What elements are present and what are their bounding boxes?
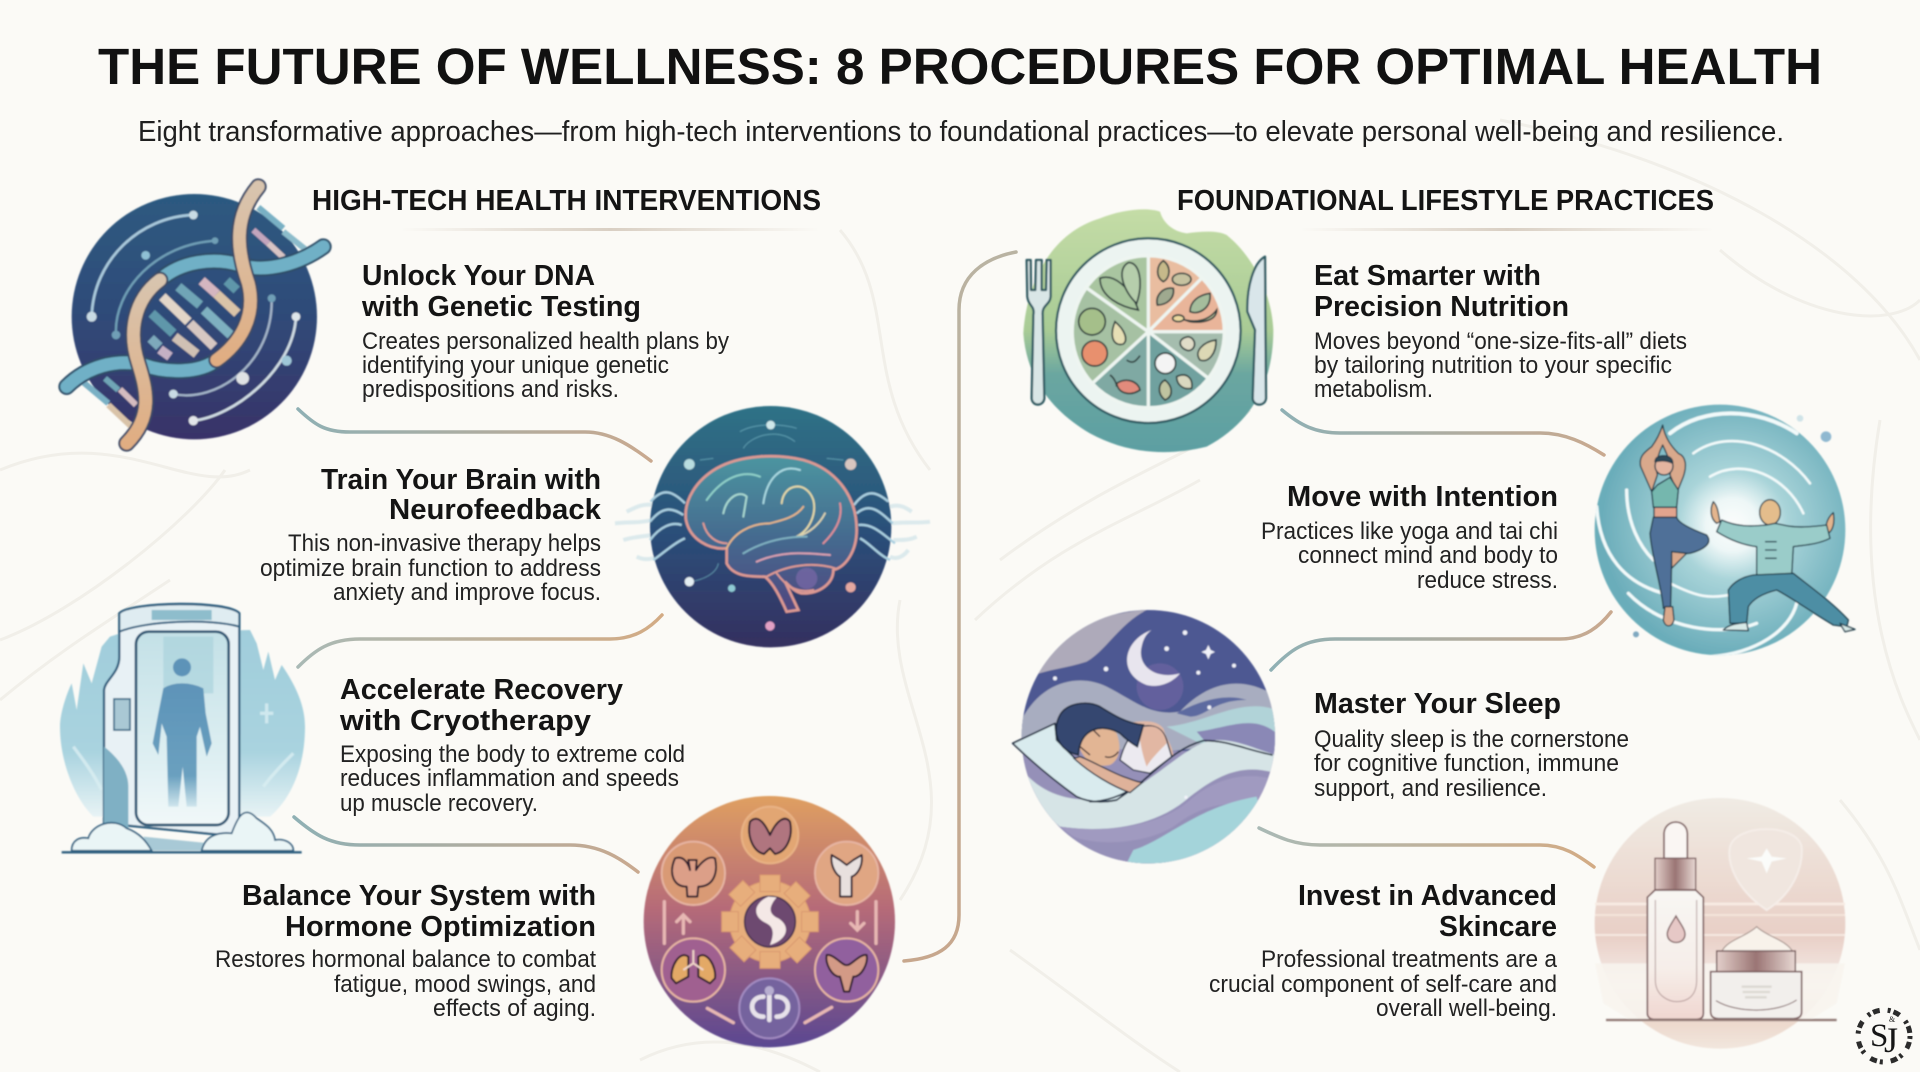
icon: skincare products (1595, 798, 1845, 1049)
text: neurofeedback: This non-invasive therapy helps (288, 530, 601, 557)
text: genetic testing: Unlock Your DNA (362, 260, 595, 292)
text: hormone optimization: Restores hormonal balance to combat (215, 946, 596, 973)
text: hormone optimization: Hormone Optimization (285, 911, 596, 943)
text: neurofeedback (260, 464, 602, 606)
title: THE FUTURE OF WELLNESS: 8 PROCEDURES FOR OPTIMAL HEALTH (98, 38, 1822, 95)
text: neurofeedback: Neurofeedback (389, 494, 602, 526)
icon: DNA helix (67, 187, 323, 443)
text: master your sleep: support, and resilience. (1314, 775, 1547, 802)
text: advanced skincare (1209, 880, 1557, 1022)
text: advanced skincare: crucial component of self-care and (1209, 971, 1557, 998)
text: move with intention: Move with Intention (1287, 481, 1558, 513)
connector: brain to cryotherapy (298, 615, 662, 667)
watermark logo (1858, 1010, 1910, 1062)
section heading: high-tech health interventions: HIGH-TECH HEALTH INTERVENTIONS (312, 185, 821, 217)
section heading: foundational lifestyle practices: FOUNDATIONAL LIFESTYLE PRACTICES (1177, 185, 1714, 217)
text: cryotherapy: up muscle recovery. (340, 790, 538, 817)
watermark logo: & (1889, 1015, 1896, 1024)
text: advanced skincare: Professional treatments are a (1261, 946, 1557, 973)
icon: cryotherapy chamber (60, 604, 305, 852)
text: neurofeedback: Train Your Brain with (321, 464, 601, 496)
text: master your sleep: Master Your Sleep (1314, 688, 1561, 720)
icon: yoga and tai chi (1595, 405, 1855, 657)
text: move with intention: reduce stress. (1417, 567, 1558, 594)
section heading: high-tech health interventions (312, 185, 821, 231)
icon: sleeping woman (1013, 607, 1280, 873)
connector: DNA to brain (298, 409, 651, 461)
text: cryotherapy (339, 674, 685, 817)
text: hormone optimization: fatigue, mood swings, and (334, 971, 596, 998)
text: advanced skincare: overall well-being. (1376, 995, 1557, 1022)
connector: plate to yoga (1282, 410, 1604, 455)
connector: cryotherapy to hormones (294, 817, 638, 872)
text: master your sleep (1314, 688, 1629, 802)
text: hormone optimization: Balance Your System with (242, 880, 596, 912)
text: precision nutrition: by tailoring nutrition to your specific (1314, 352, 1672, 379)
connector: hormones to plate (central spine) (904, 252, 1016, 961)
text: precision nutrition: Eat Smarter with (1314, 260, 1541, 292)
text: genetic testing: identifying your unique genetic (362, 352, 669, 379)
watermark logo: S (1870, 1018, 1888, 1054)
text: cryotherapy: Accelerate Recovery (340, 674, 623, 706)
icon: hormone system (644, 796, 895, 1047)
text: precision nutrition (1314, 260, 1687, 403)
text: master your sleep: for cognitive function, immune (1314, 750, 1619, 777)
text: genetic testing (361, 260, 730, 403)
text: move with intention (1261, 481, 1558, 594)
text: genetic testing: with Genetic Testing (361, 291, 641, 323)
text: master your sleep: Quality sleep is the cornerstone (1314, 726, 1629, 753)
text: genetic testing: predispositions and risks. (362, 376, 619, 403)
text: advanced skincare: Skincare (1439, 911, 1557, 943)
connector: sleep to skincare (1259, 828, 1594, 867)
text: hormone optimization: effects of aging. (433, 995, 596, 1022)
icon: brain (615, 406, 930, 647)
subtitle: Eight transformative approaches—from high-tech interventions to foundational practices—to elevate personal well-being and resilience. (138, 116, 1784, 148)
section heading: foundational lifestyle practices (1177, 185, 1714, 231)
text: move with intention: Practices like yoga and tai chi (1261, 518, 1558, 545)
watermark logo: J (1884, 1020, 1898, 1060)
icon: nutrition plate (1023, 209, 1273, 452)
text: neurofeedback: anxiety and improve focus. (333, 579, 601, 606)
text: genetic testing: Creates personalized health plans by (362, 328, 730, 355)
text: cryotherapy: reduces inflammation and speeds (340, 765, 679, 792)
text: cryotherapy: with Cryotherapy (339, 705, 591, 737)
text: neurofeedback: optimize brain function to address (260, 555, 601, 582)
text: precision nutrition: Precision Nutrition (1314, 291, 1569, 323)
text: move with intention: connect mind and body to (1298, 542, 1558, 569)
text: precision nutrition: Moves beyond “one-size-fits-all” diets (1314, 328, 1687, 355)
text: advanced skincare: Invest in Advanced (1298, 880, 1557, 912)
text: cryotherapy: Exposing the body to extreme cold (340, 741, 685, 768)
text: hormone optimization (215, 880, 596, 1022)
connector: yoga to sleep (1271, 612, 1611, 670)
text: precision nutrition: metabolism. (1314, 376, 1433, 403)
